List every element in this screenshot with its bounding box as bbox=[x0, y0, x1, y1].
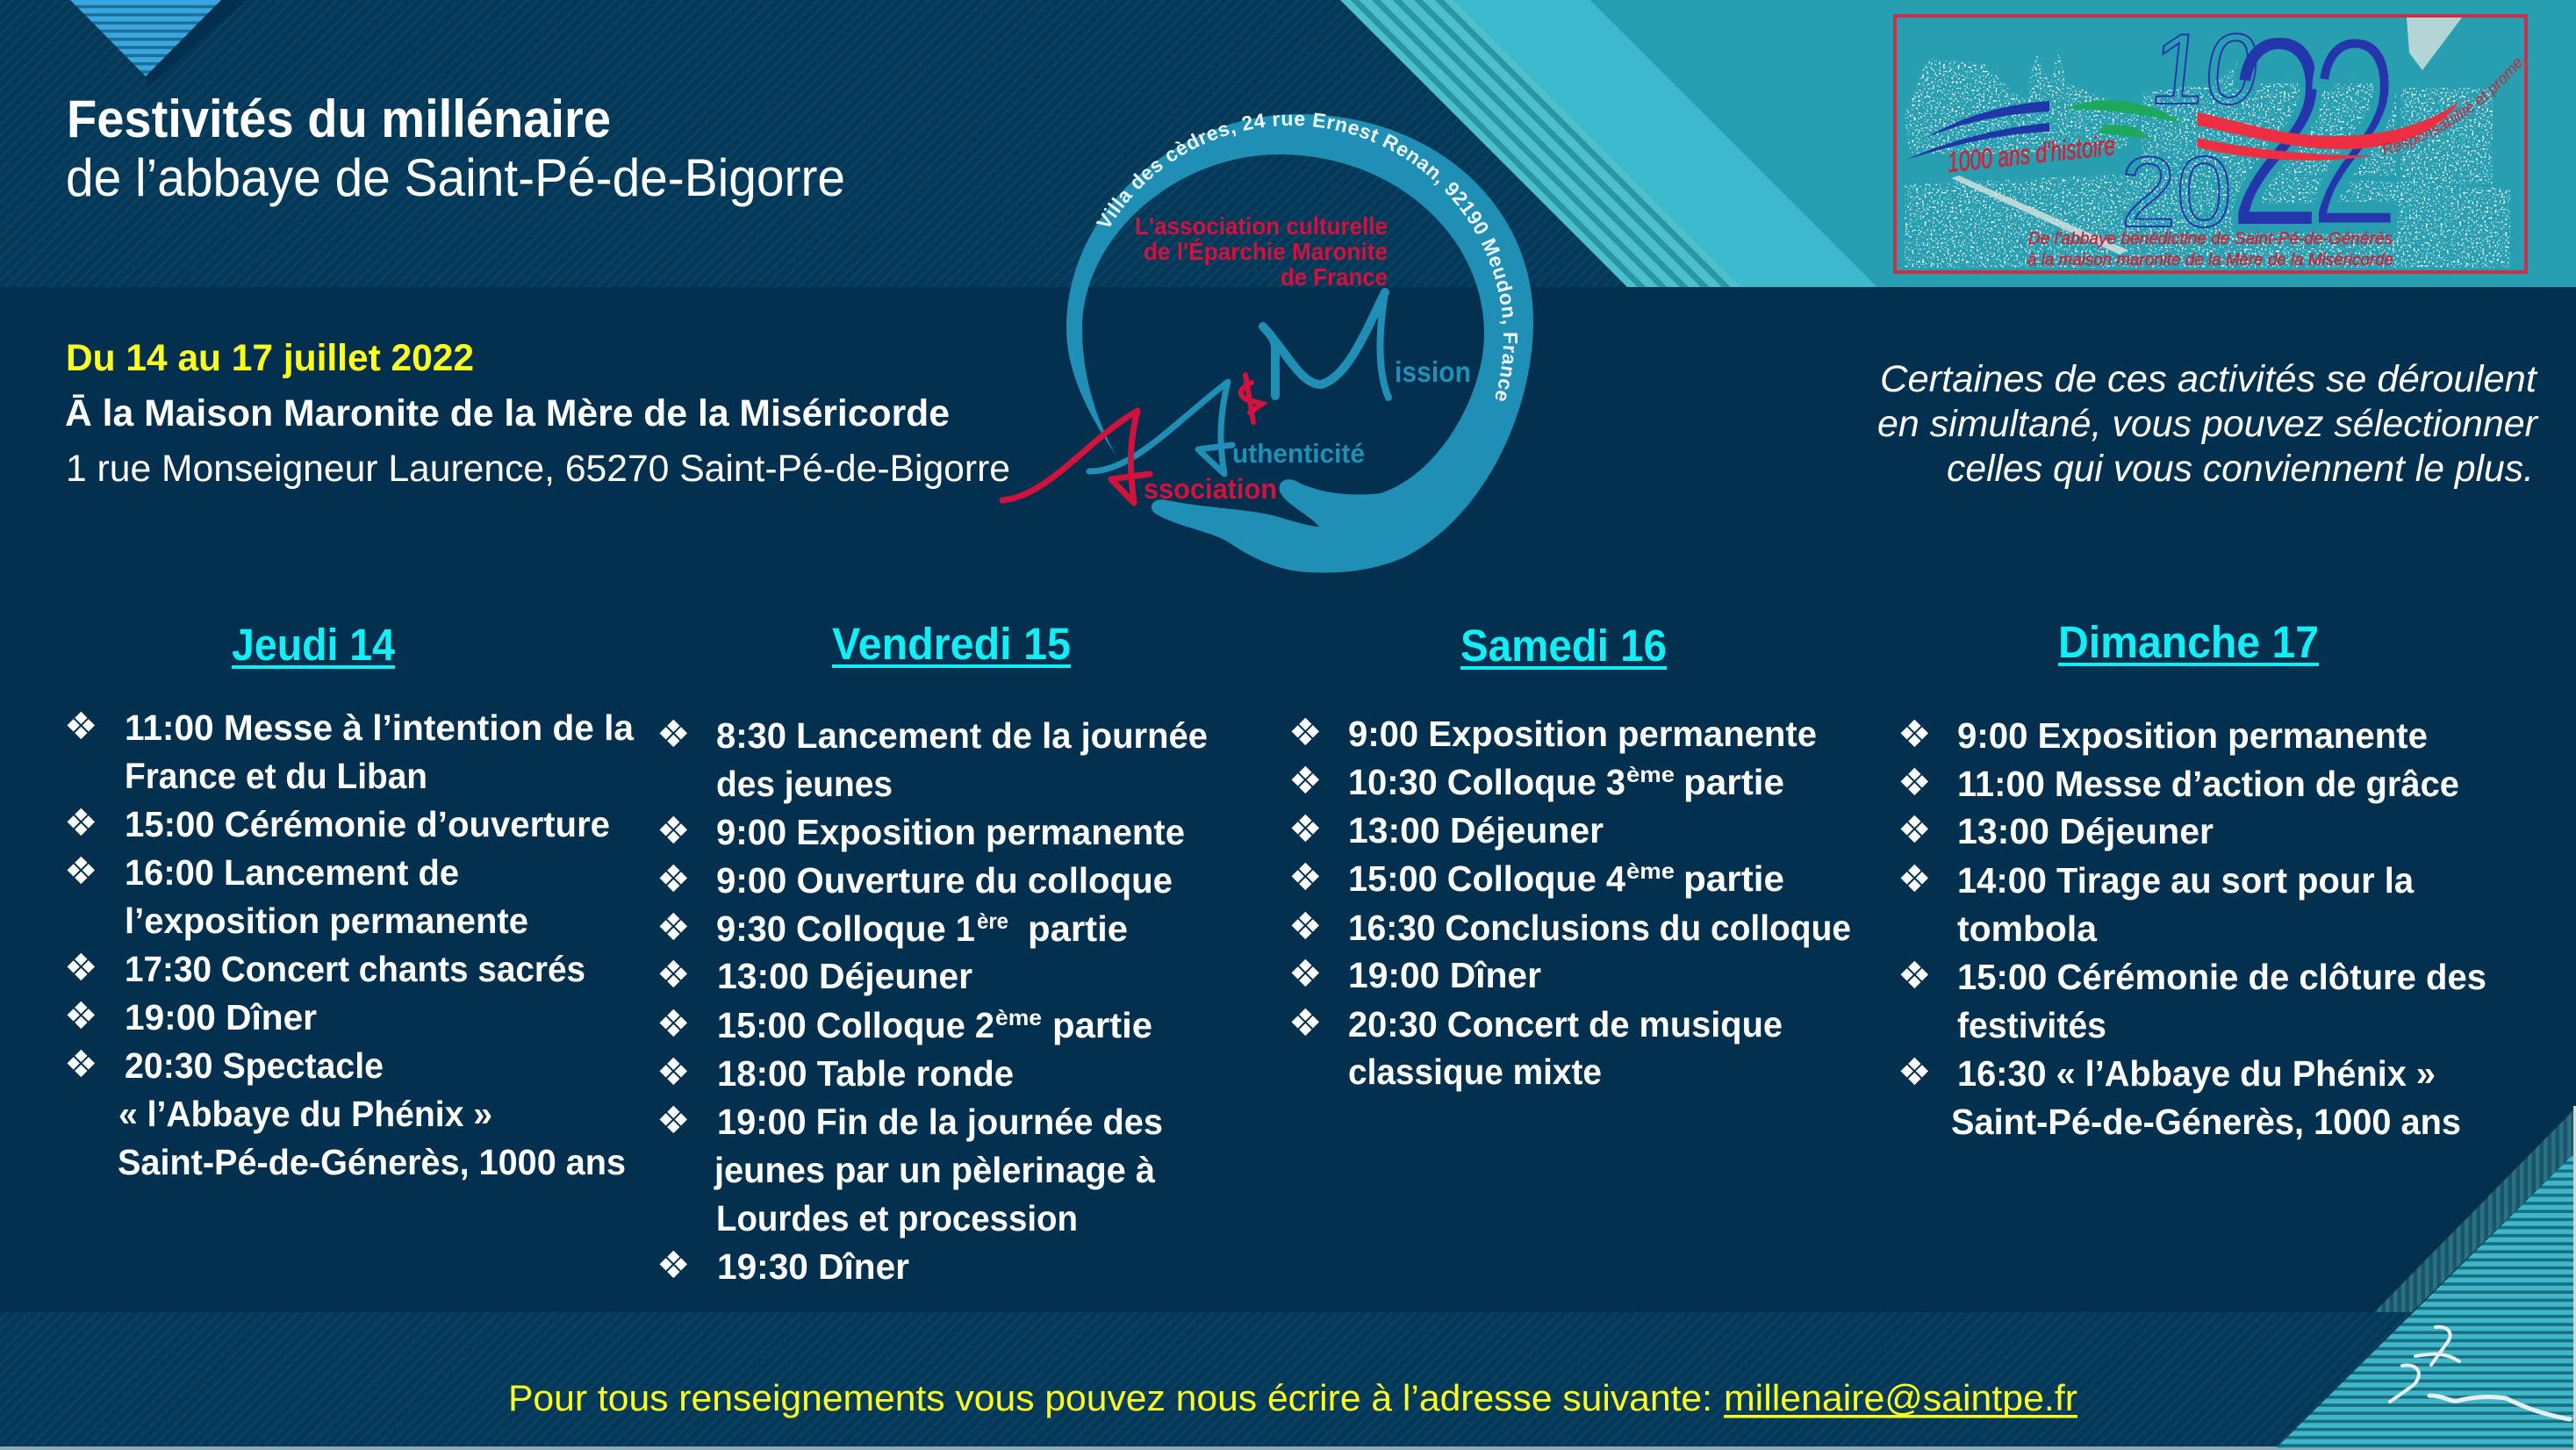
panel: Samedi 16 bbox=[1288, 621, 1851, 1092]
red ampersand bbox=[1241, 375, 1262, 422]
schedule list: France et du Liban bbox=[125, 756, 427, 796]
association logo: Villa des cèdres, 24 rue Ernest Renan, 92190 Meudon, France bbox=[1095, 112, 1518, 401]
year numerals: 20 bbox=[2120, 137, 2232, 248]
note: simultaneous activities: celles qui vous conviennent le plus. bbox=[1947, 448, 2534, 490]
schedule list bbox=[1288, 711, 1851, 1092]
logo caption: De l'abbaye bénédictine de Saint-Pé-de-Générés bbox=[2028, 230, 2393, 248]
note: simultaneous activities: Certaines de ces activités se déroulent bbox=[1880, 358, 2538, 400]
schedule list: 16:00 Lancement de bbox=[125, 852, 459, 893]
top striped band bbox=[0, 0, 2576, 287]
schedule list: partie bbox=[1683, 762, 1784, 802]
top right diagonal decoration bbox=[1340, 0, 2576, 287]
schedule list: Lourdes et procession bbox=[716, 1198, 1078, 1238]
1000 ans d'histoire: 1000 ans d'histoire bbox=[1946, 129, 2117, 178]
schedule list: ❖ bbox=[64, 1043, 98, 1087]
schedule list: 15:00 Colloque 4 bbox=[1348, 858, 1625, 899]
schedule list: 8:30 Lancement de la journée bbox=[716, 715, 1208, 756]
schedule list: ❖ bbox=[1288, 808, 1323, 851]
green swooshes bbox=[2063, 100, 2184, 139]
logo caption bbox=[2027, 230, 2393, 269]
schedule list: ❖ bbox=[657, 953, 691, 997]
schedule list: ème bbox=[995, 1006, 1042, 1030]
title line 1: Festivités du millénaire bbox=[67, 90, 611, 148]
schedule list: 20:30 Concert de musique bbox=[1348, 1004, 1783, 1044]
schedule list: ème bbox=[1626, 859, 1675, 884]
word: Association: ssociation bbox=[1144, 473, 1277, 505]
schedule list: ème bbox=[1626, 763, 1675, 787]
schedule list: ❖ bbox=[657, 906, 691, 950]
logo caption: à la maison maronite de la Mère de la Miséricorde bbox=[2027, 251, 2393, 269]
schedule list: ❖ bbox=[64, 994, 98, 1038]
bottom edge strip bbox=[0, 1446, 2576, 1450]
schedule list: 9:00 Exposition permanente bbox=[1957, 715, 2428, 756]
red swooshes bbox=[2198, 101, 2459, 161]
schedule list: ❖ bbox=[1898, 1051, 1932, 1095]
schedule list: 19:00 Fin de la journée des bbox=[717, 1102, 1163, 1142]
schedule list: ❖ bbox=[657, 809, 691, 853]
venue: Ā la Maison Maronite de la Mère de la Miséricorde bbox=[65, 392, 950, 434]
millennium logo panel bbox=[1893, 0, 2528, 289]
schedule list: ❖ bbox=[64, 705, 98, 749]
schedule list: partie bbox=[1052, 1005, 1152, 1045]
schedule list: ❖ bbox=[64, 850, 98, 894]
abbey sketch background bbox=[1905, 53, 2510, 268]
dates: Du 14 au 17 juillet 2022 bbox=[66, 337, 474, 379]
schedule list: l’exposition permanente bbox=[125, 901, 528, 941]
schedule list: 15:00 Cérémonie d’ouverture bbox=[125, 804, 610, 844]
heading: Dimanche 17 bbox=[2058, 617, 2319, 667]
schedule list: ère bbox=[977, 909, 1008, 934]
icon: signature bbox=[2390, 1327, 2570, 1419]
top left striped triangle bbox=[70, 0, 248, 88]
schedule list: partie bbox=[1028, 908, 1128, 949]
schedule list: ❖ bbox=[657, 1002, 691, 1046]
schedule list: ❖ bbox=[1288, 952, 1323, 996]
schedule list: 15:00 Cérémonie de clôture des bbox=[1957, 957, 2486, 997]
schedule list: 18:00 Table ronde bbox=[717, 1053, 1014, 1094]
script letter A in blue bbox=[1089, 382, 1232, 474]
panel: Vendredi 15 bbox=[657, 619, 1208, 1288]
logo frame bbox=[1895, 16, 2526, 272]
schedule list bbox=[1898, 713, 2486, 1142]
schedule list: ❖ bbox=[657, 1099, 691, 1143]
schedule list: des jeunes bbox=[716, 764, 893, 804]
schedule list: ❖ bbox=[1288, 856, 1323, 900]
abbey pale outlines bbox=[1951, 18, 2462, 255]
schedule list: tombola bbox=[1957, 908, 2098, 949]
schedule list: 19:00 Dîner bbox=[125, 997, 317, 1037]
schedule list bbox=[64, 705, 635, 1182]
schedule list: 9:30 Colloque 1 bbox=[716, 908, 975, 949]
panel: Jeudi 14 bbox=[64, 620, 635, 1182]
script letter A in red bbox=[1002, 411, 1150, 503]
association name in red: de l'Éparchie Maronite bbox=[1144, 238, 1388, 265]
schedule list: ❖ bbox=[1288, 711, 1323, 755]
schedule list: Saint-Pé-de-Génerès, 1000 ans bbox=[1951, 1102, 2461, 1142]
schedule list: 16:30 Conclusions du colloque bbox=[1348, 908, 1851, 948]
schedule list: 17:30 Concert chants sacrés bbox=[125, 949, 585, 989]
footer contact line: Pour tous renseignements vous pouvez nous écrire à l’adresse suivante: bbox=[508, 1377, 1712, 1418]
association name in red bbox=[1135, 212, 1388, 291]
schedule list: 10:30 Colloque 3 bbox=[1348, 762, 1625, 802]
ring address text bbox=[1108, 126, 1503, 445]
address: 1 rue Monseigneur Laurence, 65270 Saint-Pé-de-Bigorre bbox=[66, 448, 1010, 490]
schedule list: ❖ bbox=[1288, 905, 1323, 949]
year numerals: 10 bbox=[2146, 12, 2265, 125]
schedule list: ❖ bbox=[657, 858, 691, 901]
bottom right striped triangle bbox=[2276, 1106, 2576, 1450]
responsabilité et promesse bbox=[2384, 63, 2523, 155]
schedule list: festivités bbox=[1957, 1005, 2106, 1045]
word: Authenticité: uthenticité bbox=[1232, 438, 1365, 469]
schedule list: « l’Abbaye du Phénix » bbox=[118, 1094, 492, 1134]
schedule list: 13:00 Déjeuner bbox=[1957, 811, 2214, 851]
schedule list: ❖ bbox=[657, 713, 691, 757]
schedule list: 20:30 Spectacle bbox=[125, 1045, 384, 1086]
schedule list: ❖ bbox=[1898, 954, 1932, 998]
association logo bbox=[999, 112, 1533, 572]
association name in red: L'association culturelle bbox=[1135, 212, 1388, 240]
schedule list bbox=[657, 713, 1208, 1288]
event info block bbox=[65, 337, 1010, 490]
schedule list: ❖ bbox=[1288, 759, 1323, 803]
title bbox=[66, 90, 845, 207]
schedule list: 13:00 Déjeuner bbox=[717, 956, 972, 996]
blue swooshes bbox=[1906, 101, 2049, 160]
note: simultaneous activities bbox=[1877, 358, 2539, 490]
schedule list: Saint-Pé-de-Génerès, 1000 ans bbox=[118, 1142, 626, 1182]
heading: Samedi 16 bbox=[1460, 621, 1667, 671]
schedule list: 9:00 Exposition permanente bbox=[716, 812, 1185, 852]
heading: Vendredi 15 bbox=[832, 619, 1071, 669]
schedule list: 19:30 Dîner bbox=[717, 1246, 909, 1287]
schedule list: ❖ bbox=[657, 1051, 691, 1095]
schedule list: ❖ bbox=[64, 801, 98, 845]
year numerals bbox=[2120, 0, 2403, 289]
schedule list: 19:00 Dîner bbox=[1348, 955, 1541, 995]
schedule list: ❖ bbox=[64, 946, 98, 990]
note: simultaneous activities: en simultané, vous pouvez sélectionner bbox=[1877, 403, 2539, 445]
schedule list: ❖ bbox=[657, 1244, 691, 1288]
schedule list: 13:00 Déjeuner bbox=[1348, 810, 1604, 851]
email link: millenaire@saintpe.fr bbox=[1724, 1377, 2077, 1418]
schedule list: partie bbox=[1683, 858, 1784, 899]
association name in red: de France bbox=[1281, 263, 1388, 291]
schedule list: classique mixte bbox=[1348, 1052, 1602, 1092]
word: Mission: ission bbox=[1395, 355, 1471, 388]
logo ring with hand bbox=[1066, 114, 1533, 572]
title line 2: de l’abbaye de Saint-Pé-de-Bigorre bbox=[66, 148, 845, 207]
heading: Jeudi 14 bbox=[232, 620, 396, 670]
schedule list: ❖ bbox=[1898, 761, 1932, 805]
schedule list: ❖ bbox=[1898, 808, 1932, 852]
schedule list: 9:00 Exposition permanente bbox=[1348, 714, 1817, 754]
schedule list: 11:00 Messe d’action de grâce bbox=[1957, 764, 2459, 804]
schedule list: 11:00 Messe à l’intention de la bbox=[125, 707, 635, 748]
schedule list: 9:00 Ouverture du colloque bbox=[716, 860, 1173, 901]
panel: Dimanche 17 bbox=[1898, 617, 2486, 1142]
schedule list: ❖ bbox=[1898, 858, 1932, 901]
script letter M bbox=[1263, 292, 1388, 398]
schedule list: 15:00 Colloque 2 bbox=[717, 1005, 994, 1045]
schedule list: 16:30 « l’Abbaye du Phénix » bbox=[1957, 1053, 2436, 1094]
bottom striped band bbox=[0, 1312, 2576, 1446]
schedule list: ❖ bbox=[1288, 1001, 1323, 1045]
schedule list: ❖ bbox=[1898, 713, 1932, 757]
schedule list: jeunes par un pèlerinage à bbox=[714, 1150, 1155, 1190]
schedule list: 14:00 Tirage au sort pour la bbox=[1957, 860, 2415, 901]
